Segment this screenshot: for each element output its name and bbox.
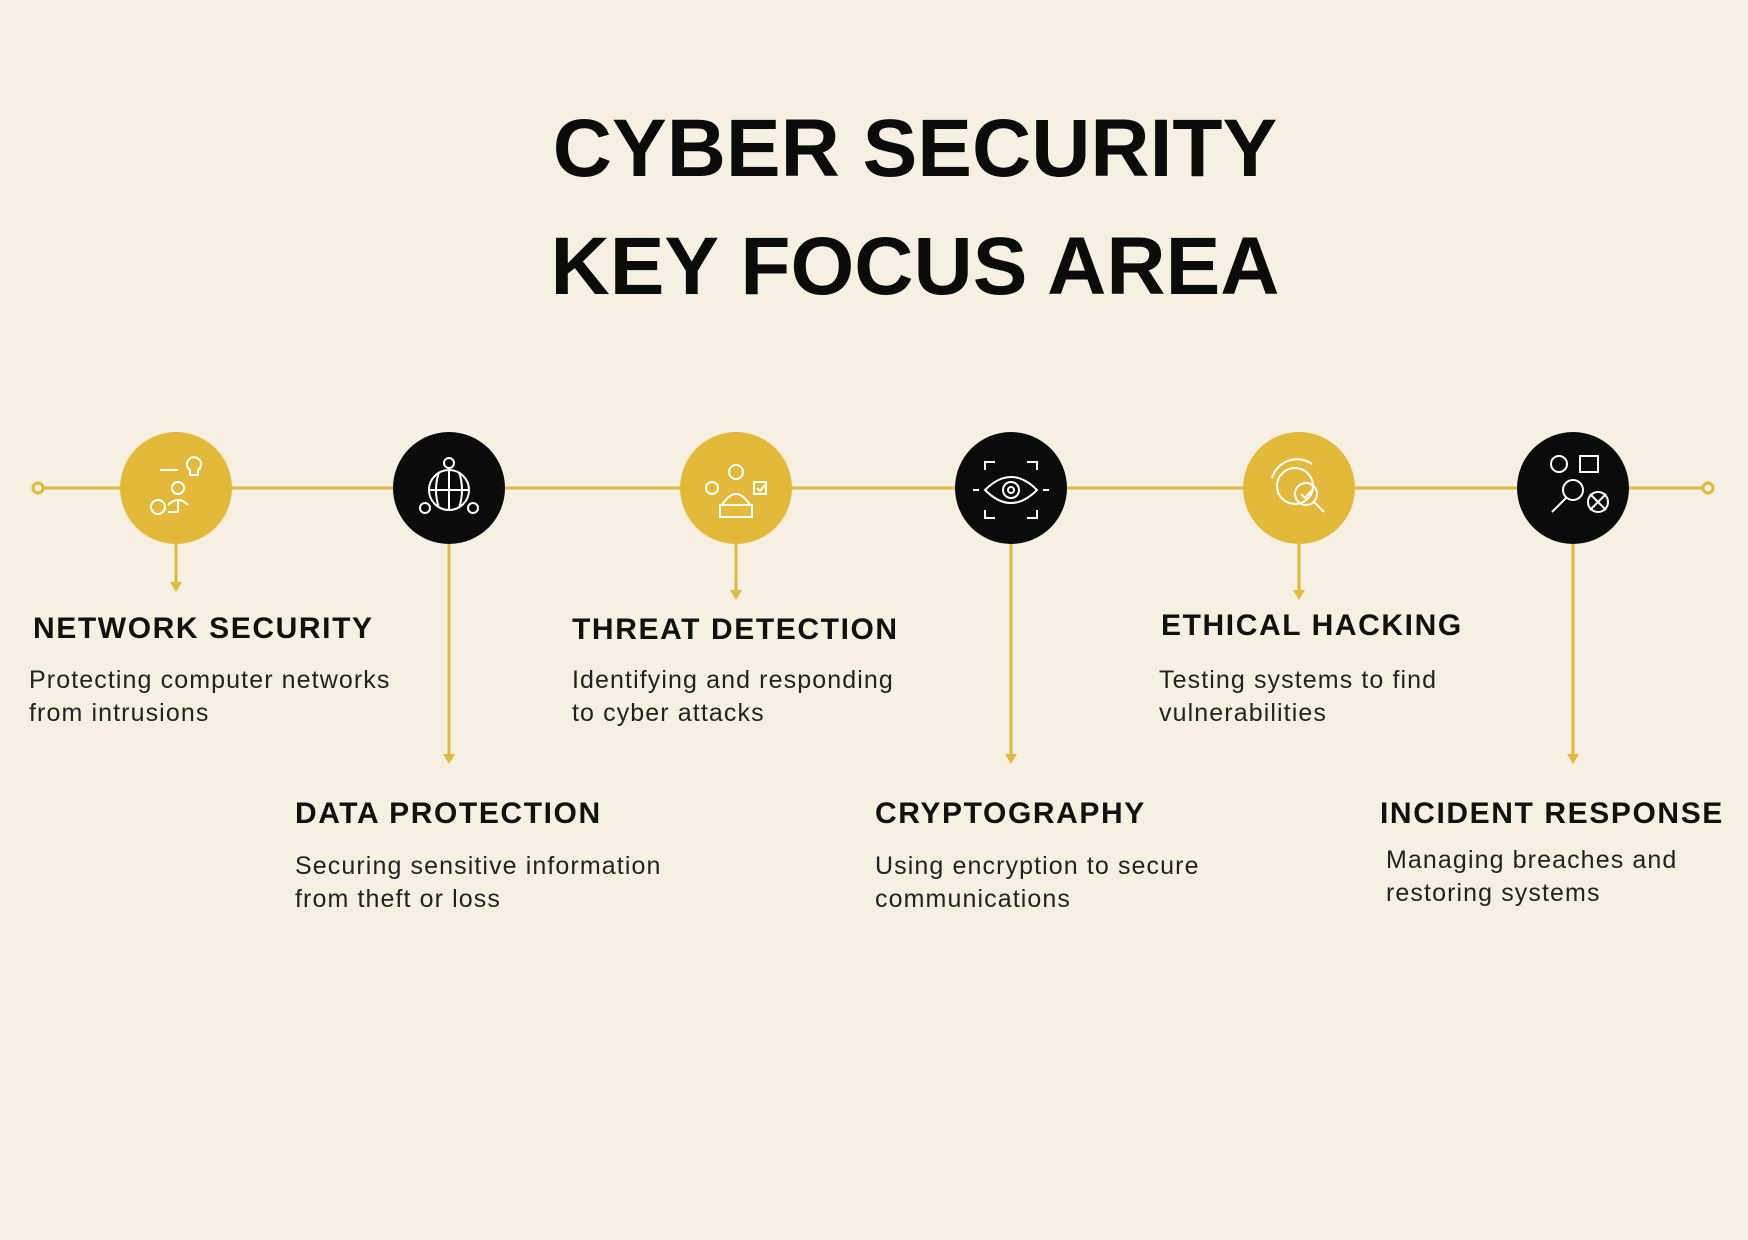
text: network security [29, 666, 391, 727]
text: ethical hacking [1159, 666, 1437, 727]
heading: incident response: INCIDENT RESPONSE [1380, 797, 1724, 830]
heading: network security: NETWORK SECURITY [33, 612, 374, 645]
text: data protection: Securing sensitive information [295, 852, 662, 880]
text: cryptography [875, 852, 1200, 913]
text: cryptography: Using encryption to secure [875, 852, 1200, 880]
text: ethical hacking: vulnerabilities [1159, 699, 1327, 727]
text: incident response [1386, 846, 1677, 907]
heading: ethical hacking: ETHICAL HACKING [1161, 609, 1463, 642]
icon: cryptography [955, 432, 1067, 544]
text: cryptography: communications [875, 885, 1071, 913]
heading: cryptography: CRYPTOGRAPHY [875, 797, 1146, 830]
icon: incident response [1517, 432, 1629, 544]
text: incident response: Managing breaches and [1386, 846, 1677, 874]
text: threat detection: Identifying and responding [572, 666, 894, 694]
text: network security: Protecting computer networks [29, 666, 391, 694]
text: ethical hacking: Testing systems to find [1159, 666, 1437, 694]
text: network security: from intrusions [29, 699, 209, 727]
icon: ethical hacking [1243, 432, 1355, 544]
title: KEY FOCUS AREA [550, 221, 1280, 312]
icon: data protection [393, 432, 505, 544]
text: threat detection [572, 666, 894, 727]
text: data protection [295, 852, 662, 913]
text: data protection: from theft or loss [295, 885, 501, 913]
icon: network security [120, 432, 232, 544]
heading: threat detection: THREAT DETECTION [572, 613, 899, 646]
text: threat detection: to cyber attacks [572, 699, 765, 727]
icon: threat detection [680, 432, 792, 544]
heading: data protection: DATA PROTECTION [295, 797, 602, 830]
title: CYBER SECURITY [553, 103, 1277, 194]
text: incident response: restoring systems [1386, 879, 1601, 907]
title [550, 103, 1280, 312]
